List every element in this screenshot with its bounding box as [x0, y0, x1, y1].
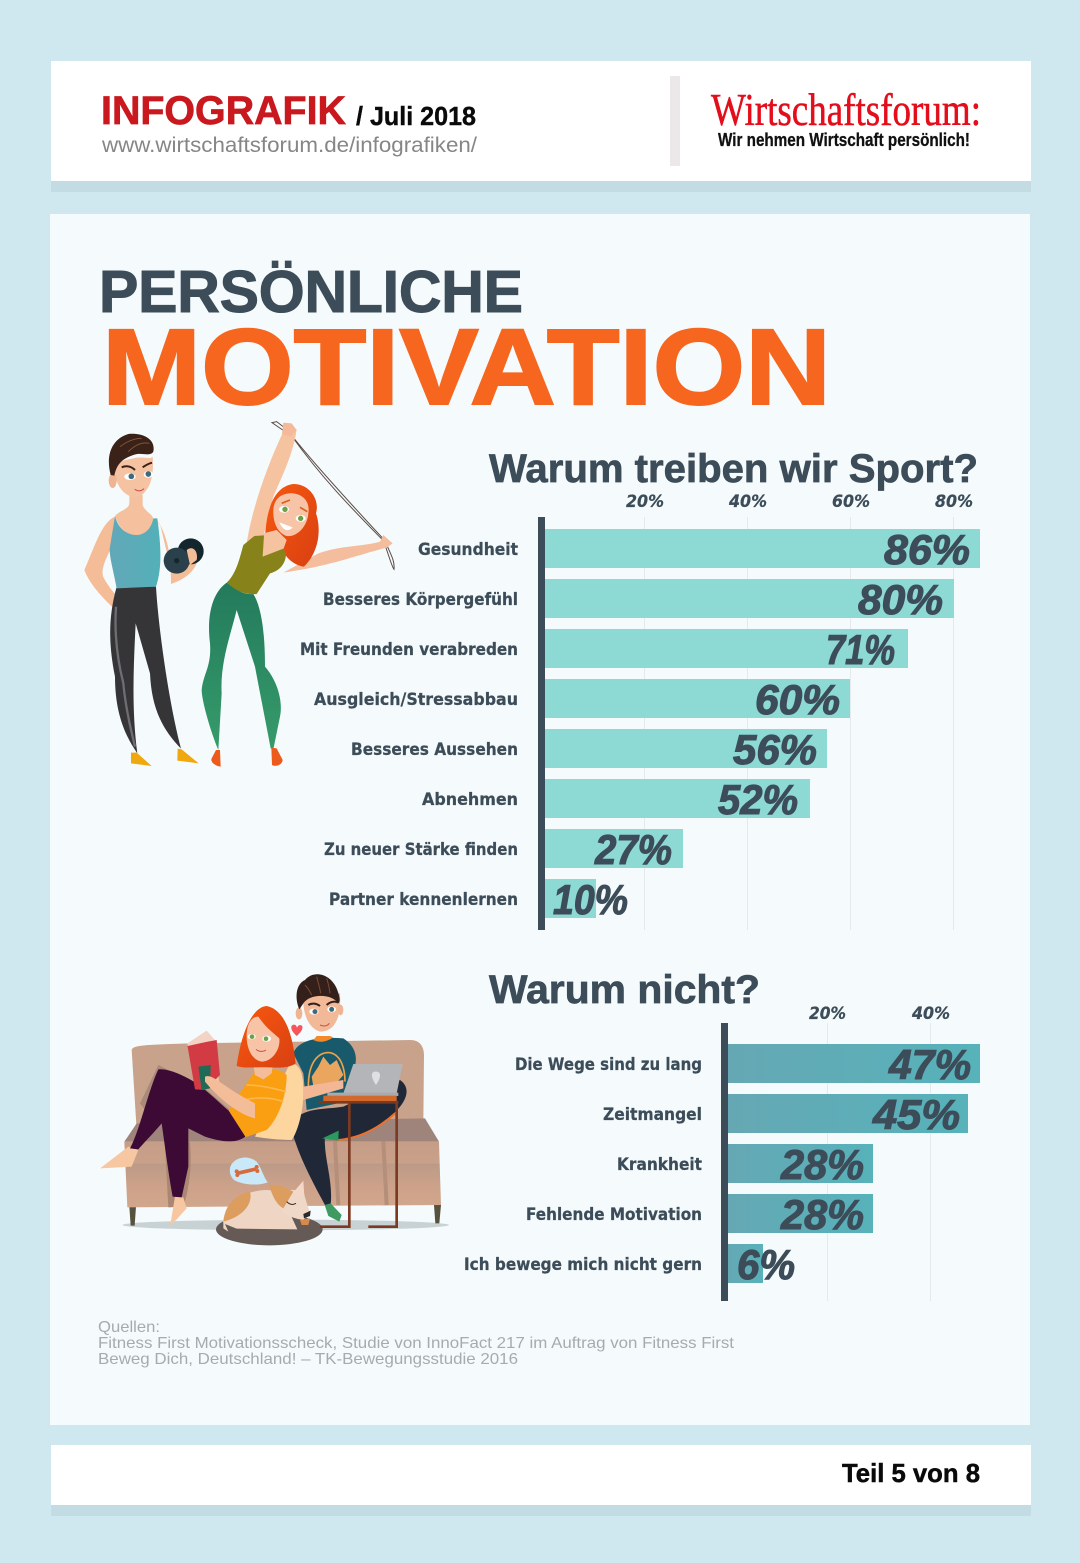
values: 80% — [858, 576, 943, 623]
title: MOTIVATION — [102, 306, 831, 427]
dog with rug and thought bubble — [216, 1157, 323, 1245]
man on sofa — [291, 974, 407, 1222]
category labels: Besseres Aussehen — [351, 740, 518, 759]
header band — [51, 61, 1031, 192]
chart heading: Warum treiben wir Sport? — [489, 447, 978, 491]
woman on sofa — [100, 1006, 303, 1227]
axis ticks: 80% — [935, 492, 973, 512]
sources: Quellen: — [98, 1319, 160, 1336]
values — [553, 526, 970, 923]
category labels: Ausgleich/Stressabbau — [314, 690, 518, 709]
values: 60% — [755, 676, 840, 723]
bars — [728, 1044, 980, 1283]
axis ticks: 20% — [809, 1004, 846, 1024]
values: 71% — [826, 626, 895, 673]
category labels: Ich bewege mich nicht gern — [464, 1255, 702, 1274]
values: 28% — [780, 1141, 864, 1188]
axis line — [538, 517, 545, 930]
main panel — [50, 214, 1030, 1425]
title: PERSÖNLICHE — [99, 259, 523, 325]
footer text: Teil 5 von 8 — [842, 1458, 980, 1488]
man — [84, 434, 204, 766]
category labels: Zeitmangel — [603, 1105, 702, 1124]
values — [737, 1041, 971, 1288]
laptop table — [318, 1064, 403, 1227]
axis ticks: 60% — [832, 492, 870, 512]
values: 6% — [737, 1241, 795, 1288]
logo: Wirtschaftsforum — [711, 85, 981, 150]
axis ticks: 40% — [911, 1004, 950, 1024]
sources: Beweg Dich, Deutschland! – TK-Bewegungsstudie 2016 — [98, 1351, 518, 1368]
logo: Wirtschaftsforum: Wirtschaftsforum: — [711, 85, 981, 135]
woman — [202, 422, 394, 767]
chart heading: Warum nicht? — [489, 968, 760, 1012]
category labels: Gesundheit — [418, 540, 518, 559]
values: 86% — [884, 526, 970, 573]
chart: Warum nicht? — [464, 968, 980, 1301]
logo: Wirtschaftsforum: Wir nehmen Wirtschaft persönlich! — [718, 129, 970, 150]
category labels: Mit Freunden verabreden — [300, 640, 518, 659]
axis ticks: 40% — [728, 492, 767, 512]
values: 52% — [718, 776, 798, 823]
footer band — [51, 1445, 1031, 1516]
axis ticks: 20% — [626, 492, 664, 512]
header url: www.wirtschaftsforum.de/infografiken/ — [101, 134, 477, 157]
axis ticks — [626, 492, 973, 512]
values: 28% — [780, 1191, 864, 1238]
header title: Infografik: INFOGRAFIK — [101, 89, 346, 133]
category labels: Besseres Körpergefühl — [323, 590, 518, 609]
category labels — [464, 1055, 702, 1274]
category labels: Die Wege sind zu lang — [515, 1055, 702, 1074]
category labels: Fehlende Motivation — [526, 1205, 702, 1224]
values: 10% — [553, 876, 628, 923]
axis ticks — [809, 1004, 950, 1024]
icon: heart — [291, 1025, 303, 1036]
bars — [545, 529, 980, 918]
values: 27% — [594, 826, 672, 873]
header date: / Juli 2018 — [356, 101, 476, 131]
category labels — [300, 540, 518, 909]
category labels: Abnehmen — [422, 790, 518, 809]
sources — [98, 1319, 735, 1368]
values: 47% — [888, 1041, 971, 1088]
axis line — [721, 1023, 728, 1301]
title — [99, 259, 831, 427]
category labels: Krankheit — [617, 1155, 702, 1174]
illustration: man and woman exercising — [84, 422, 394, 767]
sofa — [122, 1040, 449, 1230]
sources: Fitness First Motivationsscheck, Studie von InnoFact 217 im Auftrag von Fitness First — [98, 1335, 735, 1352]
dumbbell — [164, 538, 204, 574]
chart: Warum treiben wir Sport? — [300, 447, 980, 930]
illustration: couple on the sofa with dog — [100, 974, 449, 1245]
values: 45% — [872, 1091, 960, 1138]
category labels: Partner kennenlernen — [329, 890, 518, 909]
category labels: Zu neuer Stärke finden — [324, 840, 518, 859]
values: 56% — [733, 726, 817, 773]
header divider — [670, 76, 680, 166]
